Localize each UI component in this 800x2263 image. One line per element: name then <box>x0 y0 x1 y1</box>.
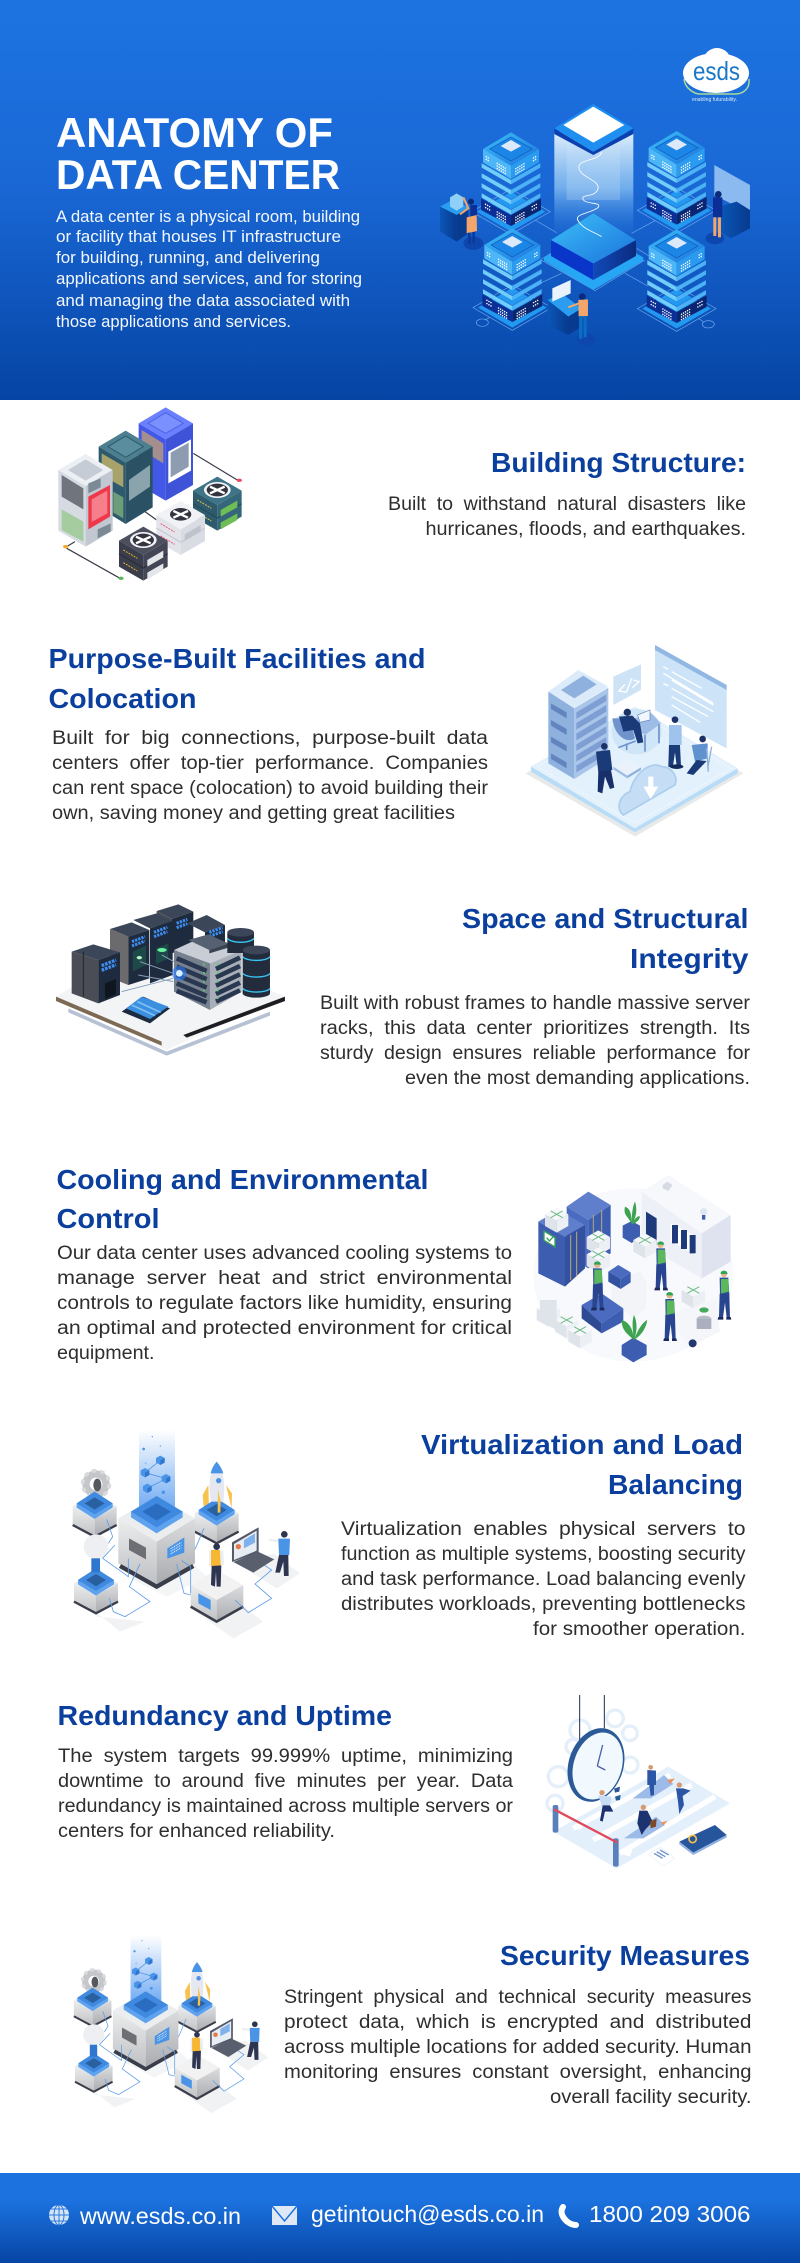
heading: Cooling and Environmental <box>56 1164 428 1195</box>
heading <box>462 903 749 974</box>
icon: team around server platform <box>526 645 743 837</box>
title: DATA CENTER <box>56 151 340 198</box>
heading: Redundancy and Uptime <box>58 1700 392 1731</box>
text block: protect data, which is encrypted and distributed <box>284 2012 752 2033</box>
icon: phone <box>562 2207 576 2225</box>
logo <box>683 48 749 103</box>
text block: monitoring ensures constant oversight, enhancing <box>284 2062 752 2083</box>
heading: Colocation <box>48 683 196 714</box>
text block: downtime to around five minutes per year. Data <box>58 1771 513 1792</box>
heading: Building Structure: <box>491 447 746 478</box>
right person at screen <box>706 165 750 244</box>
text block: for smoother operation. <box>533 1619 746 1640</box>
text block: across multiple locations for added security. Human <box>284 2037 752 2058</box>
text block: sturdy design ensures reliable performance for <box>320 1043 751 1064</box>
text block: function as multiple systems, boosting security <box>341 1544 746 1565</box>
panel: building structure <box>58 407 746 581</box>
icon: workers moving boxes and cooling units <box>533 1175 733 1362</box>
panel: security measures <box>74 1935 751 2113</box>
panel: virtualization and load balancing <box>73 1429 746 1640</box>
icon: connected virtual server blocks <box>73 1430 300 1638</box>
panel: header <box>0 0 800 400</box>
icon: globe <box>49 2205 69 2225</box>
text block: and task performance. Load balancing evenly <box>341 1569 746 1590</box>
text block: redundancy is maintained across multiple servers or <box>58 1796 514 1817</box>
intro text: for building, running, and delivering <box>56 249 320 267</box>
text block: racks, this data center prioritizes strength. Its <box>320 1018 750 1039</box>
title <box>56 109 340 198</box>
intro text <box>56 208 362 331</box>
text block: The system targets 99.999% uptime, minimizing <box>58 1746 513 1767</box>
heading: Balancing <box>608 1469 743 1500</box>
phone number: 1800 209 3006 <box>589 2201 750 2227</box>
icon: clock with runners and rockets <box>547 1695 730 1868</box>
text block: overall facility security. <box>550 2087 752 2108</box>
intro text: those applications and services. <box>56 313 291 331</box>
text block <box>284 1987 752 2108</box>
text block <box>58 1746 514 1842</box>
text block: can rent space (colocation) to avoid building their <box>52 778 489 799</box>
panel: footer <box>0 2173 800 2263</box>
text block: manage server heat and strict environmental <box>57 1268 512 1289</box>
intro text: and managing the data associated with <box>56 292 350 310</box>
heading: Purpose-Built Facilities and <box>48 643 426 674</box>
text block <box>388 494 746 540</box>
text block: Built to withstand natural disasters like <box>388 494 746 515</box>
panel: cooling and environmental control <box>56 1164 733 1364</box>
panel: purpose-built facilities <box>48 643 743 837</box>
panel: space and structural integrity <box>56 903 751 1089</box>
text block: equipment. <box>57 1343 154 1364</box>
bottom person at desk <box>548 280 595 345</box>
text block: even the most demanding applications. <box>405 1068 750 1089</box>
text block: controls to regulate factors like humidity, ensuring <box>57 1293 512 1314</box>
text block: an optimal and protected environment for critical <box>57 1318 512 1339</box>
intro text: or facility that houses IT infrastructure <box>56 228 341 246</box>
email: getintouch@esds.co.in <box>311 2201 544 2227</box>
text block: Virtualization enables physical servers to <box>341 1519 746 1540</box>
text block: centers offer top-tier performance. Companies <box>52 753 488 774</box>
text block: distributes workloads, preventing bottlenecks <box>341 1594 746 1615</box>
icon: envelope <box>272 2206 297 2225</box>
text block: Built with robust frames to handle massive server <box>320 993 751 1014</box>
heading: Space and Structural <box>462 903 748 934</box>
intro text: applications and services, and for storing <box>56 270 362 288</box>
text block <box>320 993 751 1089</box>
heading <box>48 643 426 714</box>
heading: Integrity <box>630 943 749 974</box>
logo: enabling futurability. <box>692 97 737 103</box>
text block: Stringent physical and technical security measures <box>284 1987 752 2008</box>
hero illustration: data center network <box>440 104 750 345</box>
heading: Control <box>56 1203 160 1234</box>
panel: redundancy and uptime <box>58 1695 730 1868</box>
icon: connected secure server blocks <box>74 1935 268 2113</box>
text block: Built for big connections, purpose-built data <box>52 728 488 749</box>
icon: server racks and fan units <box>58 407 242 581</box>
text block: Our data center uses advanced cooling systems to <box>57 1243 512 1264</box>
text block: own, saving money and getting great facilities <box>52 803 455 824</box>
heading: Virtualization and Load <box>421 1429 743 1460</box>
logo: esds <box>693 56 740 86</box>
heading: Security Measures <box>500 1940 750 1971</box>
text block: centers for enhanced reliability. <box>58 1821 335 1842</box>
intro text: A data center is a physical room, building <box>56 208 360 226</box>
heading <box>56 1164 428 1234</box>
left person at desk <box>440 193 483 250</box>
text block: hurricanes, floods, and earthquakes. <box>426 519 746 540</box>
title: ANATOMY OF <box>56 109 333 156</box>
text block <box>57 1243 512 1364</box>
icon: isometric server room <box>56 904 285 1056</box>
text block <box>341 1519 746 1640</box>
website: www.esds.co.in <box>79 2203 241 2229</box>
text block <box>52 728 489 824</box>
heading <box>421 1429 743 1500</box>
